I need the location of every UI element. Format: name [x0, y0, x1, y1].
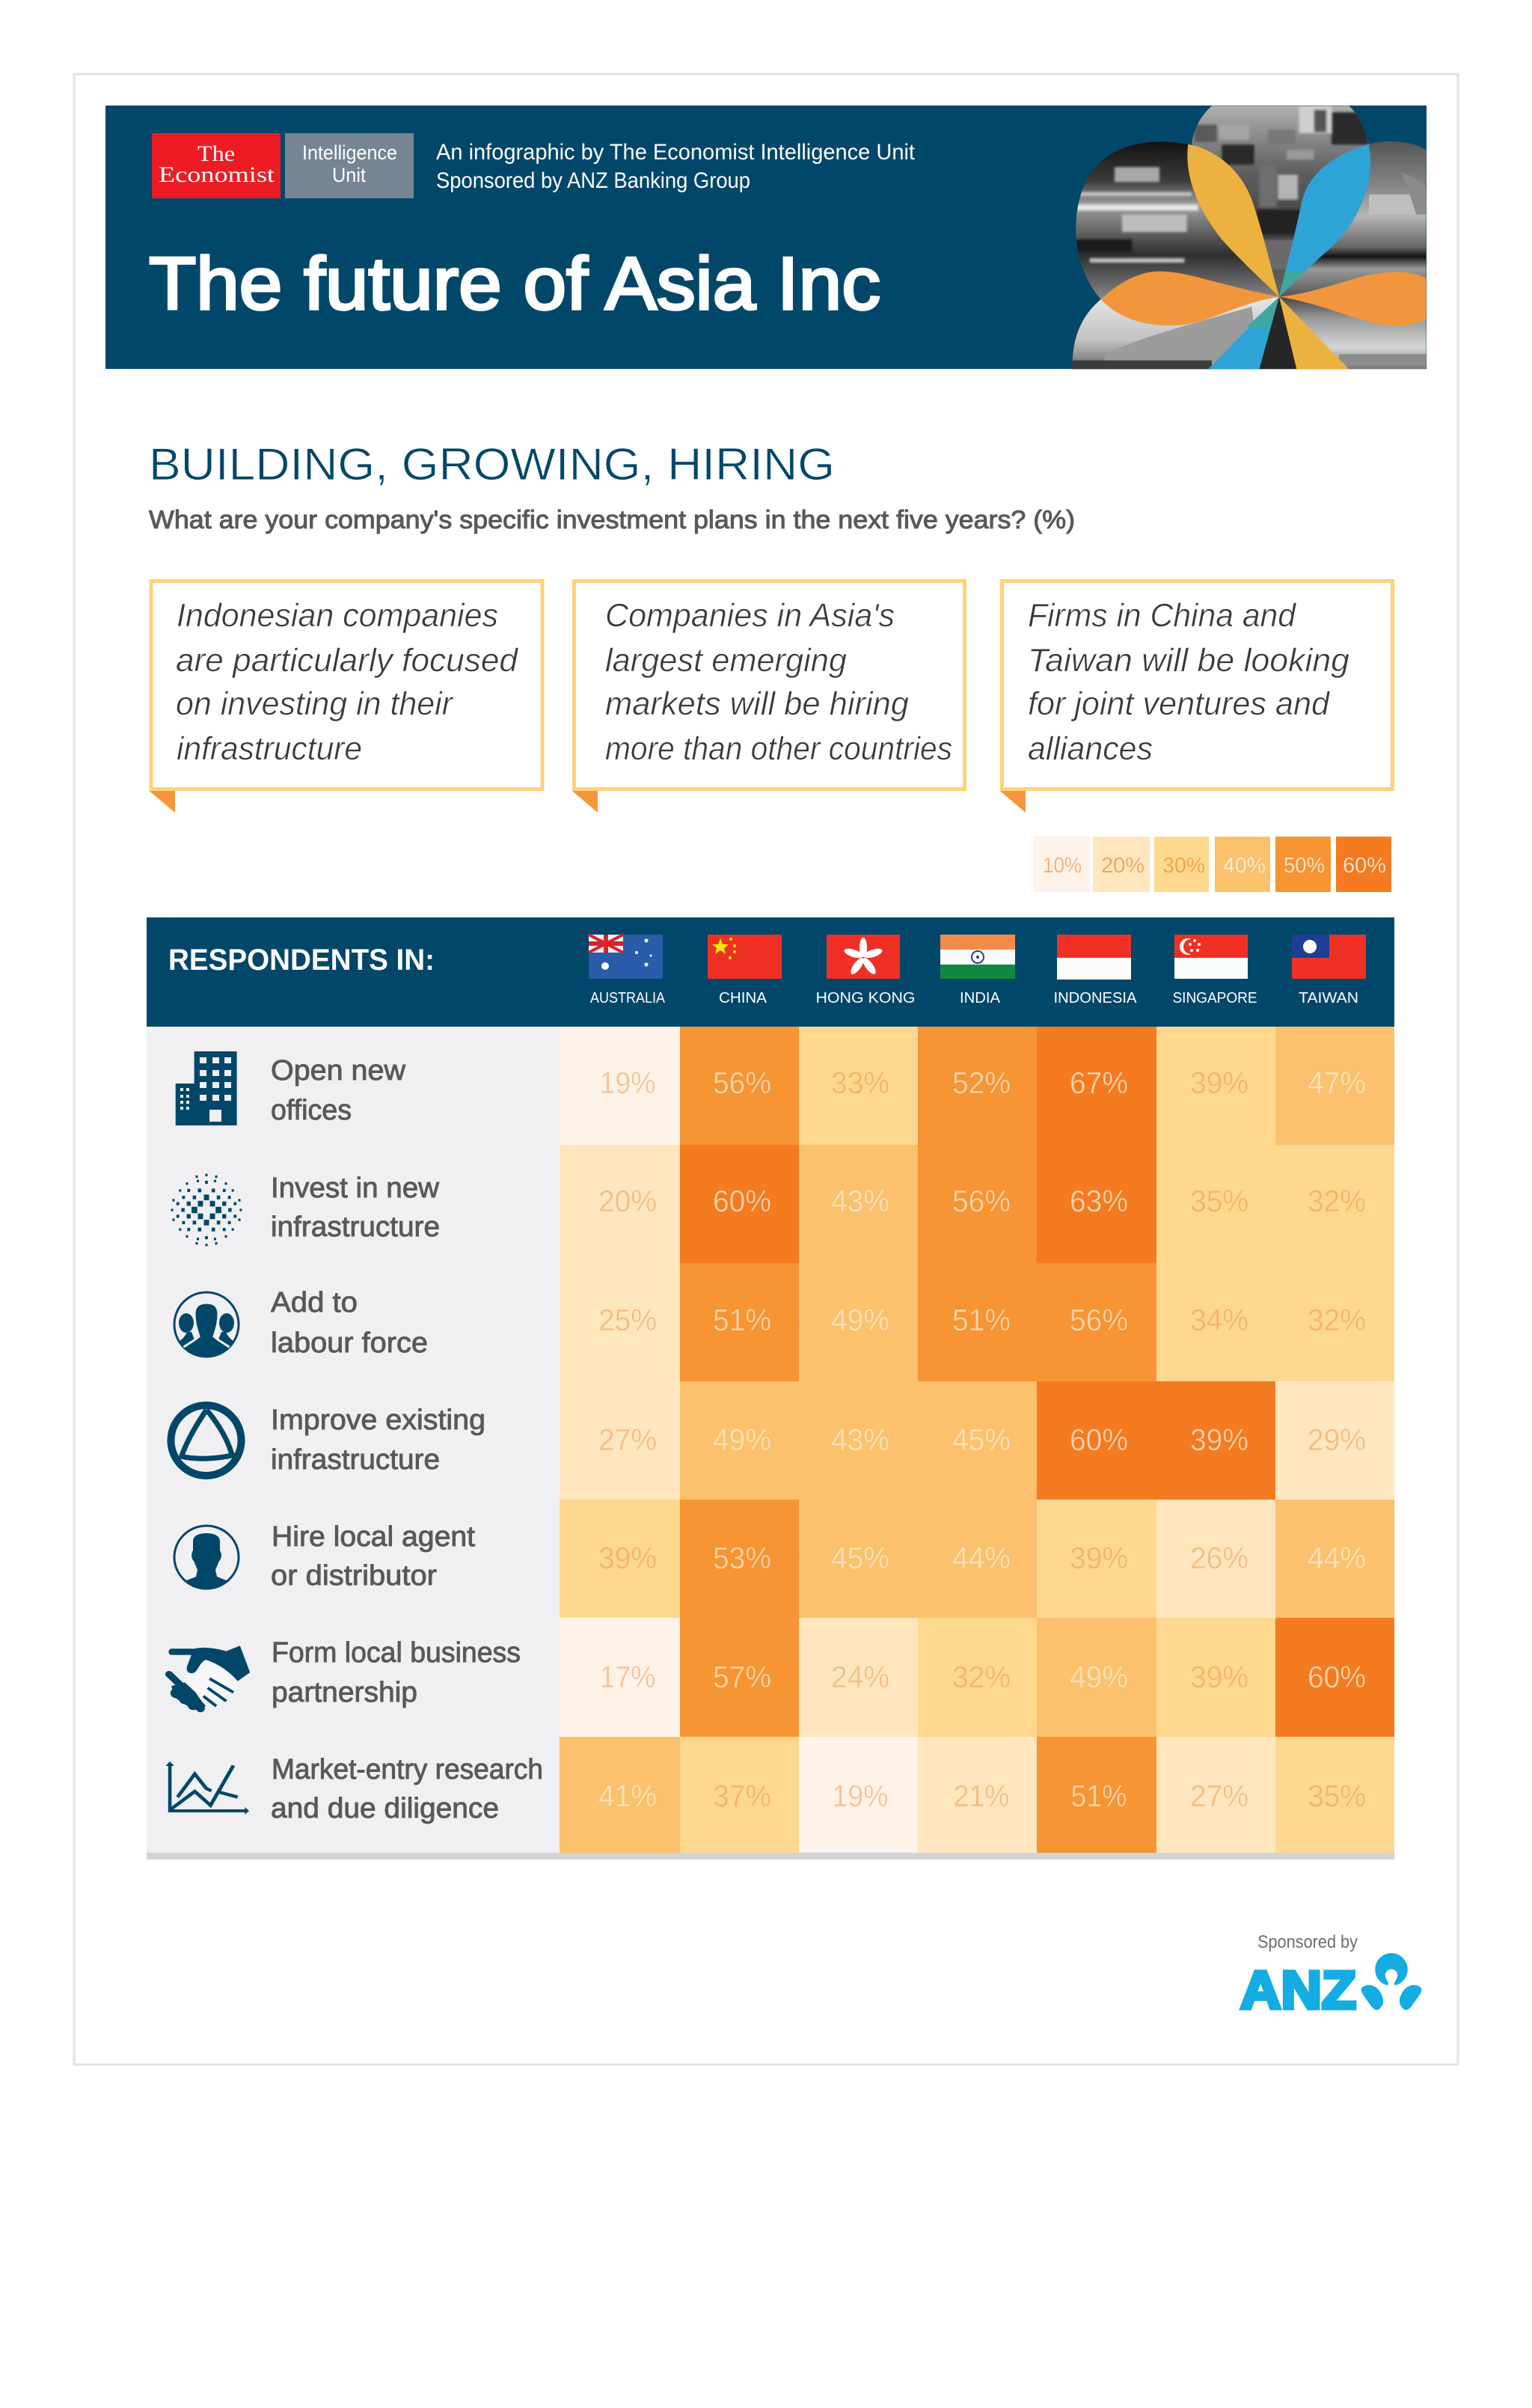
infographic: [73, 73, 1459, 2065]
logo: Intelligence Unit: Intelligence: [302, 141, 397, 164]
banner: [105, 106, 1427, 369]
label: invest in new infrastructure: [271, 1173, 440, 1243]
heatmap row: open new offices: 33%: [831, 1066, 889, 1100]
heatmap row: invest in new infrastructure: 20%: [598, 1184, 657, 1218]
heatmap row: invest in new infrastructure: 32%: [1308, 1184, 1366, 1218]
flag: Indonesia: [1057, 935, 1131, 980]
heatmap row: add to labour force: 25%: [598, 1303, 657, 1337]
callout: emerging markets: [572, 581, 965, 813]
yellow petal bottom: [1279, 297, 1349, 369]
label: market-entry research and due diligence: [271, 1754, 543, 1824]
table header bar: [147, 917, 1394, 1027]
heatmap row: hire local agent: 44%: [952, 1541, 1011, 1575]
heatmap row: open new offices: 39%: [1190, 1066, 1248, 1100]
heatmap row: invest in new infrastructure: 56%: [952, 1184, 1011, 1218]
heatmap row: market-entry research: 51%: [1071, 1779, 1127, 1813]
callout: Indonesian companies: are particularly focused: [176, 642, 519, 679]
heatmap row: improve existing infrastructure: 27%: [598, 1423, 657, 1457]
colour legend: [1033, 837, 1391, 892]
sponsor credit: Sponsored by: [1257, 1932, 1358, 1952]
heatmap row: add to labour force: 49%: [831, 1303, 889, 1337]
label: form local business partnership: partnership: [272, 1677, 417, 1708]
orange petal right: [1279, 272, 1427, 326]
row labels panel: [147, 1027, 560, 1853]
country names: SINGAPORE: [1173, 990, 1257, 1006]
heatmap row: invest in new infrastructure: [560, 1145, 1394, 1263]
heatmap row: add to labour force: 51%: [713, 1303, 771, 1337]
heatmap row: form local business partnership: 39%: [1190, 1660, 1248, 1694]
callout: emerging markets: Companies in Asia's: [605, 597, 895, 634]
label: open new offices: [271, 1055, 406, 1126]
heatmap row: form local business partnership: 32%: [952, 1660, 1011, 1694]
country names: CHINA: [719, 990, 767, 1006]
heatmap row: form local business partnership: 24%: [831, 1660, 889, 1694]
label: invest in new infrastructure: Invest in new: [271, 1173, 440, 1204]
flag: Australia: [589, 935, 663, 979]
callout: Indonesian companies: Indonesian companies: [177, 597, 498, 634]
label: form local business partnership: Form local business: [272, 1637, 521, 1669]
heatmap row: hire local agent: 45%: [831, 1541, 889, 1575]
callout: emerging markets: markets will be hiring: [605, 685, 910, 722]
heatmap row: market-entry research: [560, 1737, 1394, 1853]
banner art: petals over photographs: [1072, 106, 1427, 369]
ANZ logo: [1240, 1953, 1422, 2020]
callout: China and Taiwan: for joint ventures and: [1028, 685, 1330, 722]
icon: office building: [176, 1051, 237, 1125]
heatmap row: improve existing infrastructure: 39%: [1190, 1423, 1248, 1457]
blue petal bottom: [1208, 297, 1279, 369]
heatmap row: open new offices: 56%: [713, 1066, 771, 1100]
flag: Hong Kong: [827, 935, 900, 979]
heatmap row: hire local agent: 39%: [598, 1541, 657, 1575]
heatmap row: invest in new infrastructure: 35%: [1190, 1184, 1248, 1218]
heatmap row: open new offices: [560, 1027, 1394, 1145]
logo: The Economist: The: [197, 141, 235, 166]
icon: person: [174, 1526, 239, 1591]
colour legend: 30%: [1162, 854, 1205, 878]
flag: India: [940, 935, 1015, 979]
callout: Indonesian companies: on investing in their: [176, 685, 454, 722]
colour legend: 20%: [1101, 854, 1145, 878]
label: open new offices: Open new: [271, 1055, 406, 1087]
label: add to labour force: labour force: [271, 1327, 428, 1359]
heatmap row: form local business partnership: [560, 1618, 1394, 1737]
icon: handshake: [168, 1645, 250, 1712]
callout: China and Taiwan: [1000, 581, 1393, 813]
heatmap row: open new offices: 67%: [1070, 1066, 1128, 1100]
label: invest in new infrastructure: infrastructure: [271, 1211, 440, 1243]
heatmap row: hire local agent: 53%: [713, 1541, 771, 1575]
callout: China and Taiwan: Firms in China and: [1028, 597, 1296, 634]
country names: INDONESIA: [1053, 990, 1137, 1006]
country names: TAIWAN: [1299, 990, 1358, 1006]
icon: line chart: [165, 1761, 249, 1815]
heatmap row: invest in new infrastructure: 60%: [713, 1184, 771, 1218]
heatmap row: form local business partnership: 17%: [600, 1660, 655, 1694]
heatmap row: market-entry research: 27%: [1190, 1779, 1248, 1813]
section heading: BUILDING, GROWING, HIRING: [149, 439, 835, 489]
label: add to labour force: [271, 1287, 428, 1359]
colour legend: 60%: [1343, 854, 1386, 878]
heatmap row: add to labour force: 32%: [1308, 1303, 1366, 1337]
label: form local business partnership: [272, 1637, 521, 1708]
heatmap row: add to labour force: 34%: [1190, 1303, 1248, 1337]
icon: triangle in circle: [171, 1405, 241, 1476]
blue petal top: [1279, 144, 1370, 297]
yellow petal top: [1187, 144, 1279, 297]
banner strapline: Sponsored by ANZ Banking Group: [436, 168, 750, 193]
logo: Intelligence Unit: [285, 133, 414, 198]
label: improve existing infrastructure: infrastructure: [271, 1444, 440, 1476]
page frame: [74, 74, 1458, 2065]
heatmap row: improve existing infrastructure: 29%: [1308, 1423, 1366, 1457]
logo: The Economist: [152, 133, 281, 198]
colour legend: 40%: [1223, 854, 1266, 878]
heatmap row: form local business partnership: 49%: [1070, 1660, 1128, 1694]
heatmap row: improve existing infrastructure: 45%: [952, 1423, 1011, 1457]
country names: [590, 990, 1358, 1006]
heatmap row: open new offices: 19%: [600, 1066, 655, 1100]
logo: The Economist: Economist: [159, 162, 275, 187]
flag: Singapore: [1174, 935, 1248, 979]
heatmap row: improve existing infrastructure: 43%: [831, 1423, 889, 1457]
icon: infrastructure dots: [171, 1174, 242, 1246]
callout: Indonesian companies: [150, 581, 542, 813]
callout: emerging markets: largest emerging: [605, 642, 848, 679]
heatmap row: market-entry research: 41%: [598, 1779, 657, 1813]
section question: What are your company's specific investment plans in the next five years? (%): [149, 506, 1075, 534]
label: improve existing infrastructure: [271, 1405, 485, 1476]
heatmap row: improve existing infrastructure: 60%: [1070, 1423, 1128, 1457]
title: The future of Asia Inc: [149, 242, 880, 325]
label: hire local agent or distributor: Hire local agent: [272, 1521, 475, 1553]
flag: China: [708, 935, 782, 979]
heatmap row: form local business partnership: 57%: [713, 1660, 771, 1694]
colour legend: 50%: [1284, 854, 1325, 878]
label: improve existing infrastructure: Improve existing: [271, 1405, 485, 1436]
heatmap row: open new offices: 47%: [1308, 1066, 1366, 1100]
heatmap row: improve existing infrastructure: 49%: [713, 1423, 771, 1457]
heatmap row: market-entry research: 21%: [953, 1779, 1010, 1813]
flag: Taiwan: [1292, 935, 1366, 979]
label: market-entry research and due diligence: and due diligence: [271, 1793, 499, 1824]
heatmap row: open new offices: 52%: [952, 1066, 1011, 1100]
callout: China and Taiwan: alliances: [1028, 730, 1153, 767]
heatmap row: add to labour force: 51%: [952, 1303, 1011, 1337]
heatmap row: invest in new infrastructure: 63%: [1070, 1184, 1128, 1218]
header label: RESPONDENTS IN:: [168, 944, 435, 977]
heatmap row: hire local agent: [560, 1500, 1394, 1618]
icon: ANZ figure: [1361, 1953, 1422, 2010]
heatmap row: market-entry research: 37%: [713, 1779, 771, 1813]
orange petal left: [1101, 272, 1279, 326]
banner strapline: An infographic by The Economist Intelligence Unit: [436, 140, 916, 165]
ANZ logo: ANZ: [1240, 1961, 1356, 2020]
callout: emerging markets: more than other countries: [605, 730, 952, 767]
heatmap row: form local business partnership: 60%: [1308, 1660, 1366, 1694]
callout: China and Taiwan: Taiwan will be looking: [1028, 642, 1350, 679]
label: add to labour force: Add to: [271, 1287, 358, 1318]
label: market-entry research and due diligence: Market-entry research: [272, 1754, 543, 1785]
heatmap row: hire local agent: 44%: [1308, 1541, 1366, 1575]
country names: INDIA: [960, 990, 1001, 1006]
heatmap row: market-entry research: 35%: [1308, 1779, 1366, 1813]
country names: AUSTRALIA: [590, 990, 666, 1006]
heatmap row: market-entry research: 19%: [832, 1779, 889, 1813]
label: hire local agent or distributor: or distributor: [271, 1560, 437, 1592]
heatmap row: add to labour force: 56%: [1070, 1303, 1128, 1337]
banner strapline: [436, 140, 916, 193]
label: open new offices: offices: [271, 1095, 352, 1126]
colour legend: 10%: [1043, 854, 1082, 878]
icon: group of people: [172, 1292, 241, 1362]
logo: Intelligence Unit: Unit: [332, 164, 366, 186]
heatmap row: invest in new infrastructure: 43%: [831, 1184, 889, 1218]
heatmap row: add to labour force: [560, 1263, 1394, 1381]
heatmap row: hire local agent: 26%: [1190, 1541, 1248, 1575]
callout: Indonesian companies: infrastructure: [177, 730, 362, 767]
heatmap row: hire local agent: 39%: [1070, 1541, 1128, 1575]
country names: HONG KONG: [815, 990, 916, 1006]
heatmap row: improve existing infrastructure: [560, 1381, 1394, 1500]
label: hire local agent or distributor: [271, 1521, 475, 1592]
